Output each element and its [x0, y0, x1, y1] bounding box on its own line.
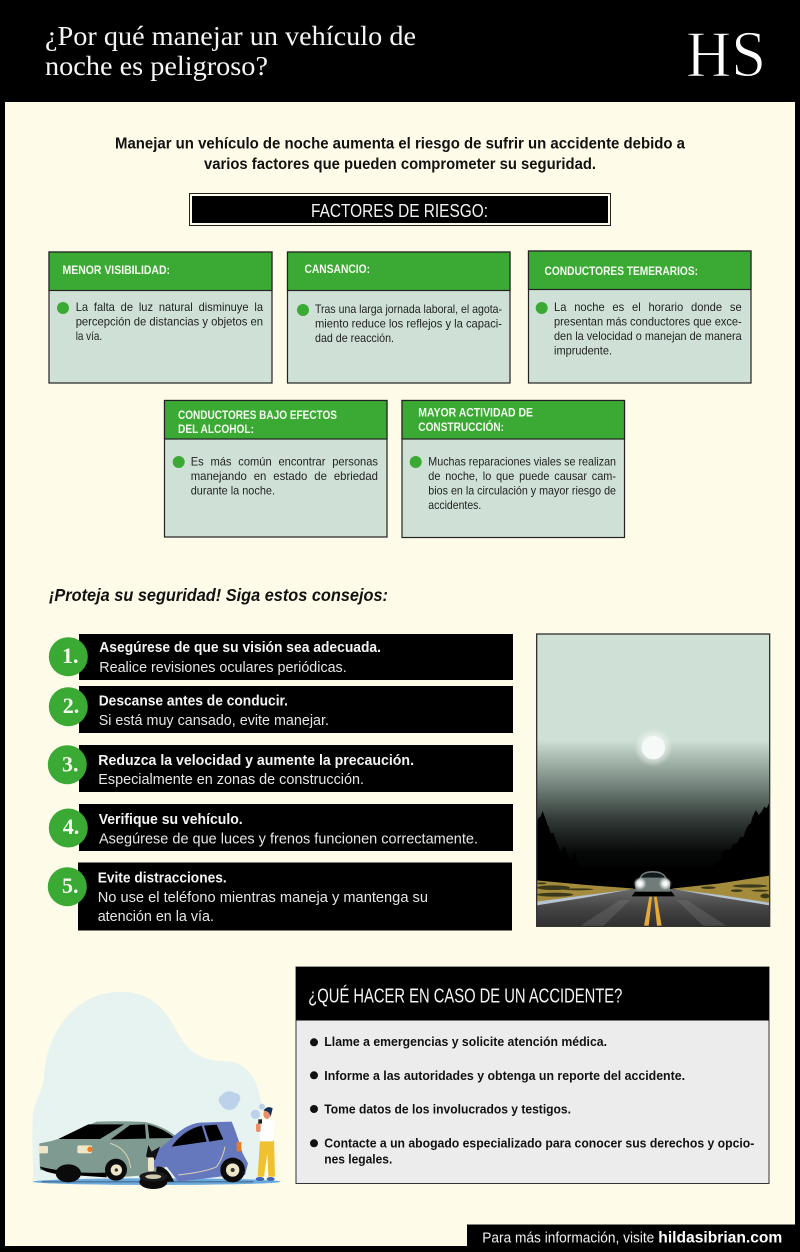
panel: menor visibilidad: MENOR VISIBILIDAD: — [62, 265, 170, 277]
panel: menor visibilidad: la vía. — [76, 329, 102, 343]
car — [632, 871, 675, 896]
tip 2: Si está muy cansado, evite manejar. — [99, 712, 329, 729]
footer: Para más información, visite — [482, 1231, 654, 1247]
title: noche es peligroso? — [45, 51, 268, 81]
tip 3: Reduzca la velocidad y aumente la precaución. — [98, 752, 414, 769]
intro text — [115, 136, 685, 173]
panel: cansancio: Tras una larga jornada laboral, el agota- — [315, 302, 502, 316]
moon — [634, 728, 673, 767]
tip 3: Especialmente en zonas de construcción. — [98, 771, 364, 788]
panel: cansancio: dad de reacción. — [315, 331, 394, 345]
panel: qué hacer en caso de un accidente: ¿QUÉ HACER EN CASO DE UN ACCIDENTE? — [308, 984, 622, 1007]
tip 5: Evite distracciones. — [98, 870, 227, 887]
tip 1: Realice revisiones oculares periódicas. — [99, 659, 347, 676]
panel: mayor actividad de construcción: bios en la circulación y mayor riesgo de — [428, 484, 616, 498]
panel: conductores temerarios: La noche es el horario donde se — [554, 300, 742, 314]
panel: mayor actividad de construcción: accidentes. — [428, 498, 481, 512]
tip 5 — [48, 862, 512, 930]
heading: factores de riesgo: FACTORES DE RIESGO: — [311, 201, 488, 221]
panel: qué hacer en caso de un accidente: Informe a las autoridades y obtenga un reporte del accidente. — [324, 1068, 685, 1083]
tip 1 — [49, 634, 513, 680]
panel: conductores bajo efectos del alcohol: Es más común encontrar personas — [191, 455, 378, 469]
smoke puff — [219, 1091, 265, 1119]
panel: conductores temerarios: imprudente. — [554, 344, 612, 358]
panel: conductores temerarios: CONDUCTORES TEMERARIOS: — [544, 266, 698, 278]
panel: mayor actividad de construcción: MAYOR ACTIVIDAD DE — [418, 407, 533, 419]
tip 2: 2. — [63, 693, 79, 718]
panel: menor visibilidad — [49, 252, 272, 383]
panel: conductores bajo efectos del alcohol: manejando en estado de ebriedad — [191, 469, 378, 483]
panel: conductores bajo efectos del alcohol: durante la noche. — [191, 484, 275, 498]
panel: conductores bajo efectos del alcohol: CONDUCTORES BAJO EFECTOS — [178, 410, 337, 422]
footer — [467, 1224, 800, 1252]
loose tyre — [139, 1172, 167, 1189]
panel: mayor actividad de construcción: Muchas reparaciones viales se realizan — [428, 455, 616, 469]
panel: conductores bajo efectos del alcohol: DEL ALCOHOL: — [178, 424, 254, 436]
panel: mayor actividad de construcción — [402, 400, 624, 538]
logo: HS: HS — [686, 18, 766, 91]
heading: factores de riesgo — [190, 194, 610, 226]
panel: menor visibilidad: La falta de luz natural disminuye la — [76, 300, 263, 314]
title: ¿Por qué manejar un vehículo de — [45, 21, 416, 51]
tip 3 — [48, 745, 513, 792]
person — [256, 1107, 275, 1181]
background blob — [32, 992, 262, 1180]
tip 4 — [49, 804, 513, 851]
illustration: night road with car — [537, 634, 770, 926]
dark brush — [537, 882, 770, 898]
ground — [33, 1178, 281, 1185]
tip 1: 1. — [62, 643, 78, 668]
panel: mayor actividad de construcción: CONSTRUCCIÓN: — [418, 421, 504, 434]
tip 2 — [49, 686, 513, 733]
panel: qué hacer en caso de un accidente: Tome datos de los involucrados y testigos. — [324, 1101, 571, 1116]
illustration: car accident — [32, 992, 281, 1189]
heading: consejos: ¡Proteja su seguridad! Siga estos consejos: — [49, 585, 388, 605]
panel: qué hacer en caso de un accidente: Contacte a un abogado especializado para conocer sus derechos y opcio- — [324, 1135, 754, 1150]
tip 3: 3. — [62, 752, 78, 777]
panel: qué hacer en caso de un accidente: Llame a emergencias y solicite atención médica. — [324, 1034, 607, 1049]
panel: cansancio: CANSANCIO: — [304, 264, 370, 276]
panel: conductores temerarios: den la velocidad o manejan de manera — [554, 329, 742, 343]
roadside hills — [537, 876, 769, 903]
panel: conductores temerarios: presentan más conductores que exce- — [554, 314, 742, 328]
tip 5: atención en la vía. — [98, 908, 214, 925]
panel: menor visibilidad: percepción de distancias y objetos en — [76, 315, 263, 329]
panel: qué hacer en caso de un accidente — [296, 967, 769, 1184]
panel: qué hacer en caso de un accidente: nes legales. — [324, 1151, 392, 1166]
tip 4: Asegúrese de que luces y frenos funcionen correctamente. — [99, 831, 478, 848]
footer: hildasibrian.com — [658, 1230, 782, 1247]
panel: cansancio: miento reduce los reflejos y la capaci- — [315, 316, 502, 330]
road — [537, 889, 769, 926]
grey car — [39, 1121, 180, 1182]
panel: conductores temerarios — [528, 251, 751, 383]
tip 1: Asegúrese de que su visión sea adecuada. — [99, 639, 381, 656]
trees — [537, 803, 770, 890]
intro text: Manejar un vehículo de noche aumenta el riesgo de sufrir un accidente debido a — [115, 136, 685, 152]
intro text: varios factores que pueden comprometer su seguridad. — [204, 156, 596, 173]
tip 2: Descanse antes de conducir. — [99, 693, 288, 710]
tip 5: 5. — [62, 873, 78, 898]
panel: cansancio — [288, 252, 510, 383]
tip 4: 4. — [63, 814, 79, 839]
tip 5: No use el teléfono mientras maneja y mantenga su — [98, 889, 428, 906]
title — [45, 21, 416, 81]
tip 4: Verifique su vehículo. — [99, 811, 243, 828]
centre lines — [644, 897, 652, 926]
panel: mayor actividad de construcción: de noche, lo que puede causar cam- — [428, 469, 616, 483]
panel: conductores bajo efectos del alcohol — [164, 400, 387, 537]
blue car — [146, 1122, 248, 1182]
